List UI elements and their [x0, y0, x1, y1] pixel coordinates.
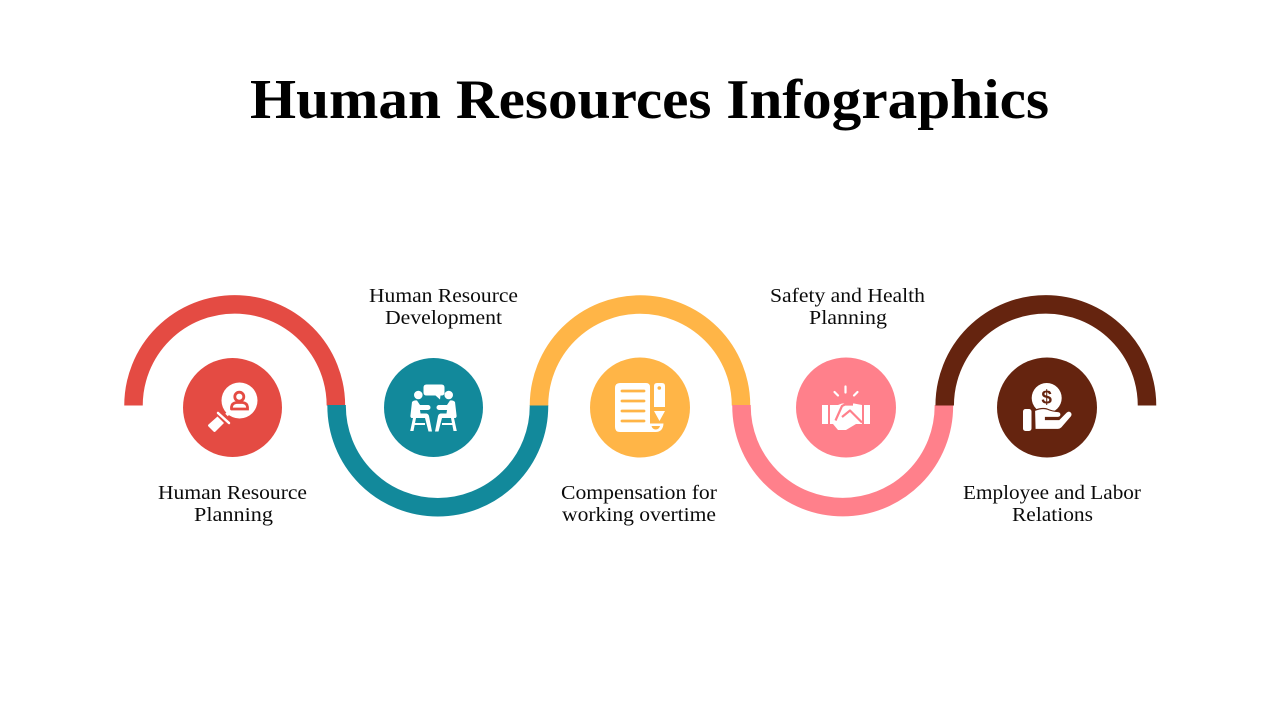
arc: step 2 teal: [337, 405, 539, 507]
label: [963, 482, 1141, 526]
label: Development: [385, 307, 502, 329]
step 1: human resource planning: [158, 358, 307, 526]
icon: document and pencil: [615, 383, 665, 432]
icon: magnifier with person: [208, 382, 258, 432]
circle: brown: [997, 358, 1097, 458]
label: Planning: [194, 504, 273, 526]
label: [770, 285, 925, 329]
step 5: employee and labor relations: [963, 358, 1141, 526]
title: Human Resources Infographics: [250, 69, 1049, 131]
label: Relations: [1012, 504, 1093, 526]
step 4: safety and health planning: [770, 285, 925, 458]
circle: yellow: [590, 358, 690, 458]
icon: hand holding dollar coin: $: [1041, 388, 1052, 408]
icon: handshake: [822, 386, 870, 430]
label: [158, 482, 307, 526]
arc: step 4 pink: [742, 405, 944, 507]
label: Planning: [809, 307, 887, 329]
label: working overtime: [562, 504, 716, 526]
step 2: human resource development: [369, 285, 518, 457]
arc: step 3 yellow: [539, 304, 741, 406]
icon: two people talking: [410, 384, 457, 432]
wave connector: [134, 304, 1147, 507]
step 3: compensation for working overtime: [561, 358, 717, 526]
arc: step 5 brown: [945, 304, 1147, 406]
circle: red: [183, 358, 282, 457]
label: [369, 285, 518, 329]
circle: pink: [796, 358, 896, 458]
circle: teal: [384, 358, 483, 457]
label: Human Resource: [158, 482, 307, 504]
arc: step 1 red: [134, 304, 336, 406]
label: Employee and Labor: [963, 482, 1141, 504]
label: Compensation for: [561, 482, 717, 504]
icon: hand holding dollar coin: [1023, 383, 1072, 431]
label: [561, 482, 717, 526]
label: Safety and Health: [770, 285, 925, 307]
label: Human Resource: [369, 285, 518, 307]
